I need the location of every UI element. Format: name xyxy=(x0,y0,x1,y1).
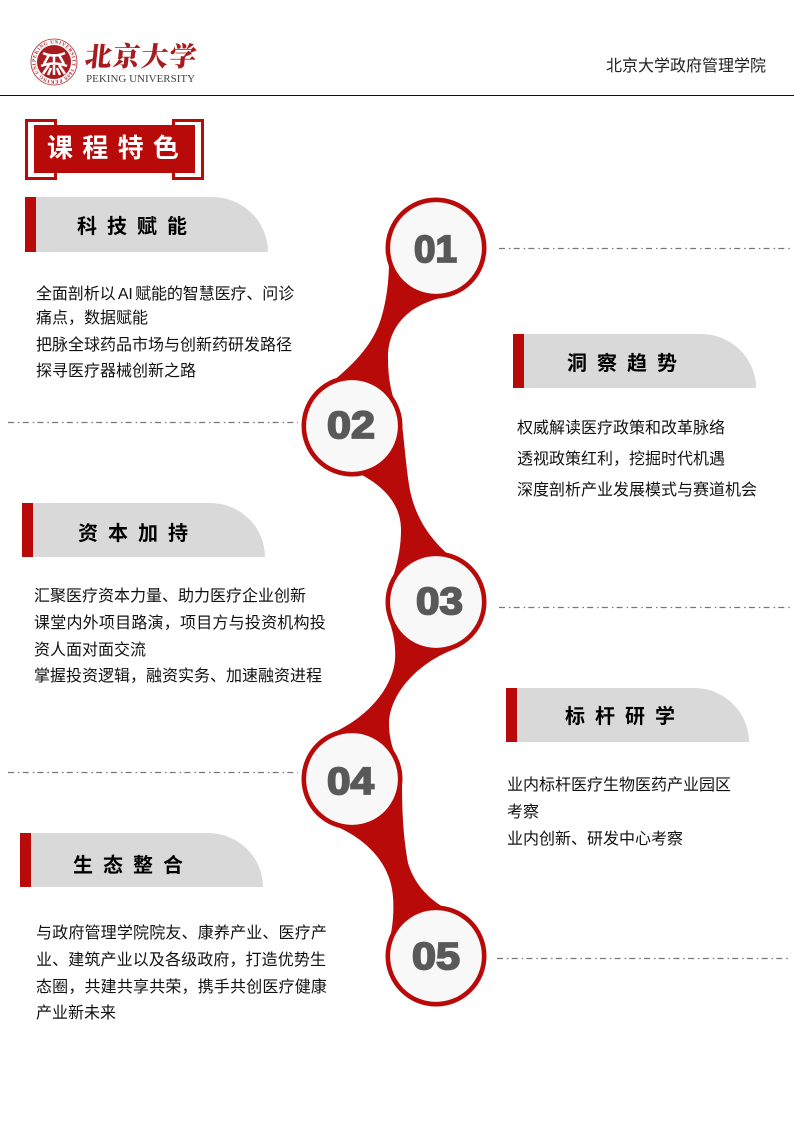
panel: 标杆研学 text xyxy=(507,776,731,848)
panel: 科技赋能 text: 把脉全球药品市场与创新药研发路径 xyxy=(36,337,292,354)
panel: 生态整合 heading: 生态整合 xyxy=(73,855,193,877)
circle 05: 05 xyxy=(412,936,460,978)
connector 04 to 05 xyxy=(340,775,445,938)
panel: 科技赋能 text xyxy=(36,285,294,380)
panel: 标杆研学 heading xyxy=(506,688,749,742)
circle 02 xyxy=(304,378,400,474)
circle 03 xyxy=(388,554,484,650)
circle 03: 03 xyxy=(416,581,463,623)
panel: 资本加持 heading: 资本加持 xyxy=(78,523,198,545)
panel: 生态整合 text: 态圈，共建共享共荣，携手共创医疗健康 xyxy=(36,979,327,996)
timeline: red connector with numbered circles xyxy=(302,198,486,1006)
circle 01 xyxy=(388,200,484,296)
panel: 洞察趋势 heading: 洞察趋势 xyxy=(567,353,687,375)
header xyxy=(0,0,794,96)
circle 04 xyxy=(304,731,400,827)
panel: 科技赋能 text: 探寻医疗器械创新之路 xyxy=(36,363,196,380)
panel: 洞察趋势 text xyxy=(517,419,757,499)
section title badge xyxy=(25,119,204,180)
panel: 生态整合 heading xyxy=(20,833,263,887)
panel: 生态整合 text xyxy=(36,924,327,1022)
connector 03 to 04 xyxy=(328,618,452,765)
school name: 北京大学政府管理学院 xyxy=(606,58,766,75)
panel: 资本加持 text: 汇聚医疗资本力量、助力医疗企业创新 xyxy=(34,588,306,605)
panel: 标杆研学 text: 业内标杆医疗生物医药产业园区 xyxy=(507,777,731,794)
connector 02 to 03 xyxy=(360,415,450,585)
connector 01 to 02 xyxy=(332,262,445,412)
panel: 洞察趋势 heading xyxy=(513,334,756,388)
panel: 标杆研学 text: 业内创新、研发中心考察 xyxy=(507,831,683,848)
panel: 生态整合 text: 产业新未来 xyxy=(36,1005,116,1022)
panel: 资本加持 text xyxy=(34,587,326,685)
panel: 科技赋能 heading xyxy=(25,197,268,252)
panel: 资本加持 text: 掌握投资逻辑，融资实务、加速融资进程 xyxy=(34,668,322,685)
logo English name: PEKING UNIVERSITY xyxy=(86,73,195,85)
circle 05 xyxy=(388,908,484,1004)
panel: 洞察趋势 text: 透视政策红利，挖掘时代机遇 xyxy=(517,451,725,468)
icon: Peking University seal: PEKING UNIVERSITY 1898 PEKING UNI xyxy=(32,40,76,84)
circle 01: 01 xyxy=(414,229,457,271)
panel: 科技赋能 text: 痛点，数据赋能 xyxy=(36,310,148,327)
section title text: 课程特色 xyxy=(47,133,188,163)
panel: 资本加持 heading xyxy=(22,503,265,557)
panel: 洞察趋势 text: 权威解读医疗政策和改革脉络 xyxy=(517,420,725,437)
panel: 资本加持 text: 资人面对面交流 xyxy=(34,642,146,659)
panel: 标杆研学 text: 考察 xyxy=(507,804,539,821)
panel: 科技赋能 heading: 科技赋能 xyxy=(77,216,197,238)
panel: 资本加持 text: 课堂内外项目路演，项目方与投资机构投 xyxy=(34,615,326,632)
logo wordmark: 北京大学 xyxy=(83,35,200,74)
panel: 科技赋能 text: 全面剖析以 AI 赋能的智慧医疗、问诊 xyxy=(36,286,294,303)
circle 02: 02 xyxy=(327,405,375,447)
panel: 标杆研学 heading: 标杆研学 xyxy=(565,706,685,728)
panel: 生态整合 text: 与政府管理学院院友、康养产业、医疗产 xyxy=(36,925,327,942)
panel: 洞察趋势 text: 深度剖析产业发展模式与赛道机会 xyxy=(517,482,757,499)
panel: 生态整合 text: 业、建筑产业以及各级政府，打造优势生 xyxy=(36,952,326,969)
circle 04: 04 xyxy=(327,761,374,803)
